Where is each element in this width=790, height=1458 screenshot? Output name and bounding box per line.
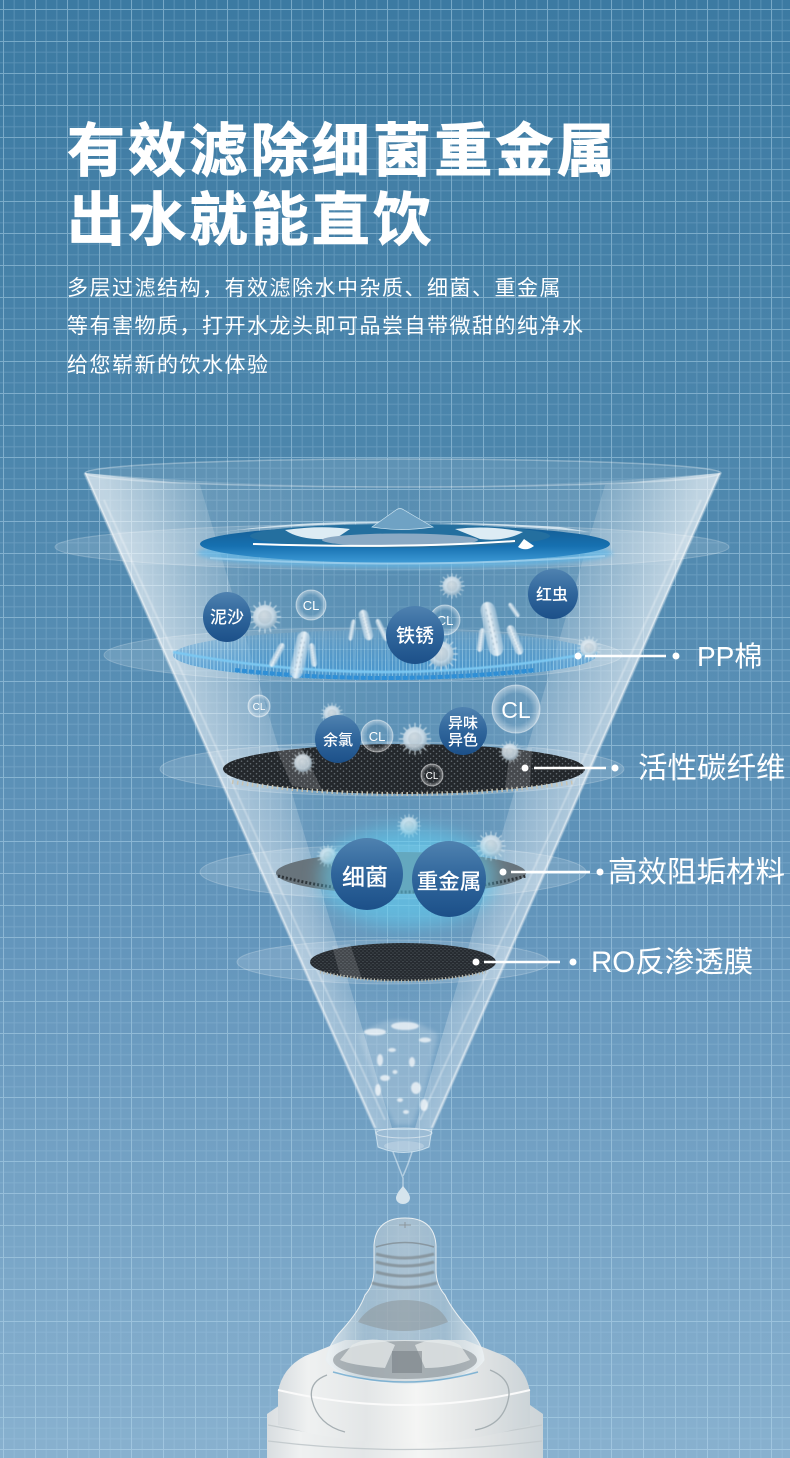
bottle cap <box>278 1340 530 1444</box>
title <box>67 119 618 253</box>
anti-scale layer <box>276 852 526 894</box>
label: PP cotton <box>574 641 762 672</box>
contaminant particles <box>249 573 601 867</box>
chlorine bubbles: CL <box>303 598 319 613</box>
ball: rust <box>386 606 444 664</box>
chlorine bubbles: CL <box>369 729 385 744</box>
bottle collar <box>267 1405 543 1458</box>
activated carbon layer <box>223 744 585 794</box>
ball: bacteria <box>331 838 403 910</box>
ball: red worms: 红虫 <box>536 586 568 604</box>
chlorine bubbles: CL <box>426 771 439 782</box>
ball: mud <box>203 592 251 642</box>
title: 有效滤除细菌重金属 <box>67 119 618 184</box>
ball: odour and colour <box>439 707 487 755</box>
bubbles in cone tip <box>358 1020 438 1125</box>
label: activated carbon: 活性碳纤维 <box>638 752 786 785</box>
intro paragraph <box>67 277 584 377</box>
intro paragraph: 多层过滤结构，有效滤除水中杂质、细菌、重金属 <box>67 277 562 300</box>
label: anti-scale material: 高效阻垢材料 <box>608 856 785 889</box>
chlorine bubbles: CL <box>437 613 453 628</box>
ball: odour and colour: 异味 <box>448 715 478 732</box>
label: RO membrane <box>472 946 753 979</box>
label: activated carbon <box>522 752 786 785</box>
ball: red worms <box>528 569 578 619</box>
label: RO membrane: RO反渗透膜 <box>591 946 753 979</box>
ball: mud: 泥沙 <box>210 608 244 627</box>
ball: rust: 铁锈 <box>396 625 434 647</box>
ball: heavy metals: 重金属 <box>417 870 481 894</box>
PP cotton layer <box>173 630 597 680</box>
water drop <box>393 1152 412 1204</box>
halo discs <box>55 524 729 984</box>
chlorine bubbles: CL <box>253 702 266 713</box>
silicone nipple <box>326 1218 484 1384</box>
baby bottle <box>267 1218 543 1458</box>
glow behind large balls <box>320 827 496 927</box>
ball: bacteria: 细菌 <box>342 864 388 890</box>
title: 出水就能直饮 <box>67 188 434 253</box>
intro paragraph: 等有害物质，打开水龙头即可品尝自带微甜的纯净水 <box>67 315 584 338</box>
chlorine bubbles: CL <box>501 697 531 723</box>
ball: heavy metals <box>412 841 486 917</box>
label: anti-scale material <box>500 856 785 889</box>
label: PP cotton: PP棉 <box>697 641 762 672</box>
ball: odour and colour: 异色 <box>448 732 478 749</box>
chlorine bubbles <box>248 590 540 786</box>
ball: residual chlorine: 余氯 <box>323 731 353 749</box>
RO membrane layer <box>310 943 496 981</box>
filter cone <box>85 459 721 1128</box>
ball: residual chlorine <box>315 715 361 763</box>
intro paragraph: 给您崭新的饮水体验 <box>67 354 270 377</box>
water ripple <box>197 508 613 568</box>
cone nozzle <box>375 1128 432 1152</box>
